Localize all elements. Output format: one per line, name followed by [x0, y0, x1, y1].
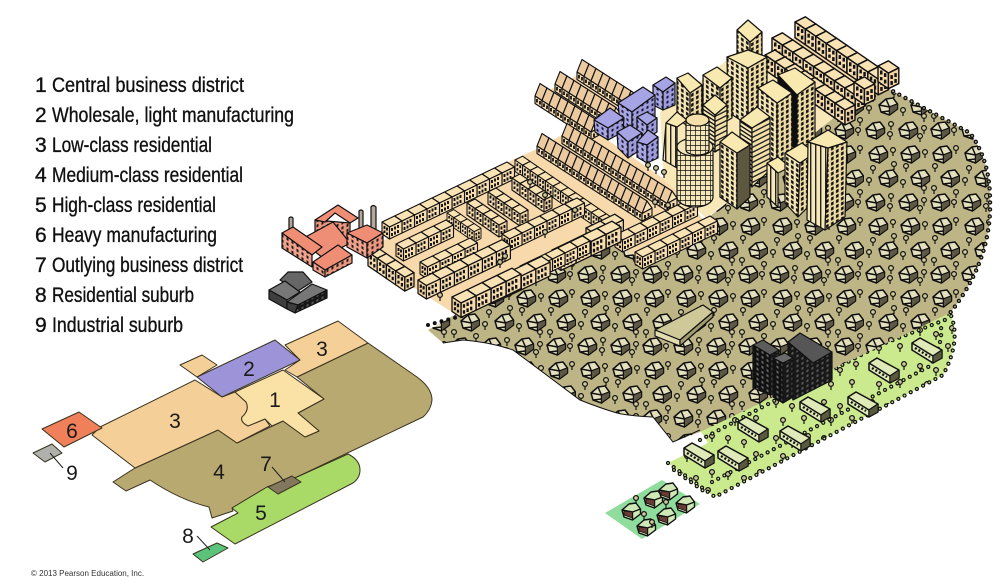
tall stepped tower: [727, 20, 767, 125]
zone 4 medium-class residential: [113, 343, 432, 518]
legend item 1: 1: [35, 74, 47, 97]
ground: low-class residential: [368, 28, 889, 316]
striped tower centre: [740, 107, 770, 187]
legend item 5: High-class residential: [52, 194, 216, 217]
legend item 7: Outlying business district: [52, 254, 243, 277]
legend item 8: Residential suburb: [52, 284, 194, 307]
legend item 9: 9: [35, 314, 47, 337]
leader lines: [50, 453, 285, 550]
legend item 3: 3: [35, 134, 47, 157]
zone numbers: [66, 338, 328, 548]
zone 3 low-class residential: [92, 321, 368, 468]
legend item 1: Central business district: [52, 74, 244, 97]
row houses: top left peaked rows: [535, 60, 643, 140]
office block in suburb: [655, 305, 713, 346]
zone numbers: 8: [182, 525, 194, 548]
ground: medium-class residential with houses: [428, 88, 990, 442]
zone numbers: 5: [255, 502, 267, 525]
outlying business district towers: [753, 333, 832, 403]
zone 1 central business district: [235, 370, 324, 437]
copyright: © 2013 Pearson Education, Inc.: [31, 569, 144, 578]
legend item 9: Industrial suburb: [52, 314, 183, 337]
front tower: [785, 143, 815, 217]
estate houses: high-class residential: [684, 338, 942, 471]
row houses: low-class residential: [368, 124, 718, 317]
zone numbers: 4: [213, 461, 225, 484]
wide tower behind centre: [758, 80, 792, 167]
factory: heavy manufacturing: [282, 205, 383, 277]
tallest front tower: [807, 130, 847, 230]
ground: high-class residential with trees: [668, 313, 955, 497]
zone 8 residential suburb: [193, 543, 228, 562]
legend item 5: 5: [35, 194, 47, 217]
zone numbers: 9: [66, 462, 78, 485]
legend item 6: Heavy manufacturing: [52, 224, 217, 247]
left tower behind cylinder: [663, 112, 687, 168]
short striped tower: [703, 95, 727, 152]
legend item 4: Medium-class residential: [52, 164, 243, 187]
zone numbers: 7: [260, 453, 272, 476]
black tower: [778, 68, 815, 150]
legend: [35, 74, 294, 337]
zone numbers: 2: [243, 358, 255, 381]
trees among row houses: [438, 163, 670, 301]
zone 2 wholesale, light manufacturing: [197, 340, 300, 397]
cylinder tower: [677, 114, 713, 207]
row houses: top right rows: [765, 17, 899, 125]
zone numbers: 1: [269, 389, 281, 412]
small front tower: [767, 157, 790, 207]
zone 5 high-class residential: [211, 454, 360, 544]
zone 7 outlying business district: [268, 476, 301, 494]
legend item 2: Wholesale, light manufacturing: [52, 104, 294, 127]
zone 9 industrial suburb: [33, 444, 62, 462]
legend item 6: 6: [35, 224, 47, 247]
zone numbers: 3: [316, 338, 328, 361]
ground: central business district: [660, 50, 842, 218]
isometric city: [269, 17, 990, 539]
dark windowed tower: [720, 132, 750, 209]
flat key map: [33, 321, 432, 562]
legend item 7: 7: [35, 254, 47, 277]
legend item 8: 8: [35, 284, 47, 307]
legend item 3: Low-class residential: [52, 134, 212, 157]
factory chimneys: [289, 206, 376, 235]
tower far left: [677, 73, 702, 128]
zone numbers: 3: [169, 410, 181, 433]
legend item 2: 2: [35, 104, 47, 127]
zone 6 heavy manufacturing: [42, 412, 102, 447]
residential suburb tract: [605, 480, 700, 539]
tower back left: [703, 67, 732, 125]
zone numbers: 6: [66, 420, 78, 443]
legend item 4: 4: [35, 164, 47, 187]
industrial suburb factory: [269, 272, 327, 313]
skyscrapers: central business district: [663, 20, 847, 230]
purple wholesale buildings: [594, 77, 675, 163]
